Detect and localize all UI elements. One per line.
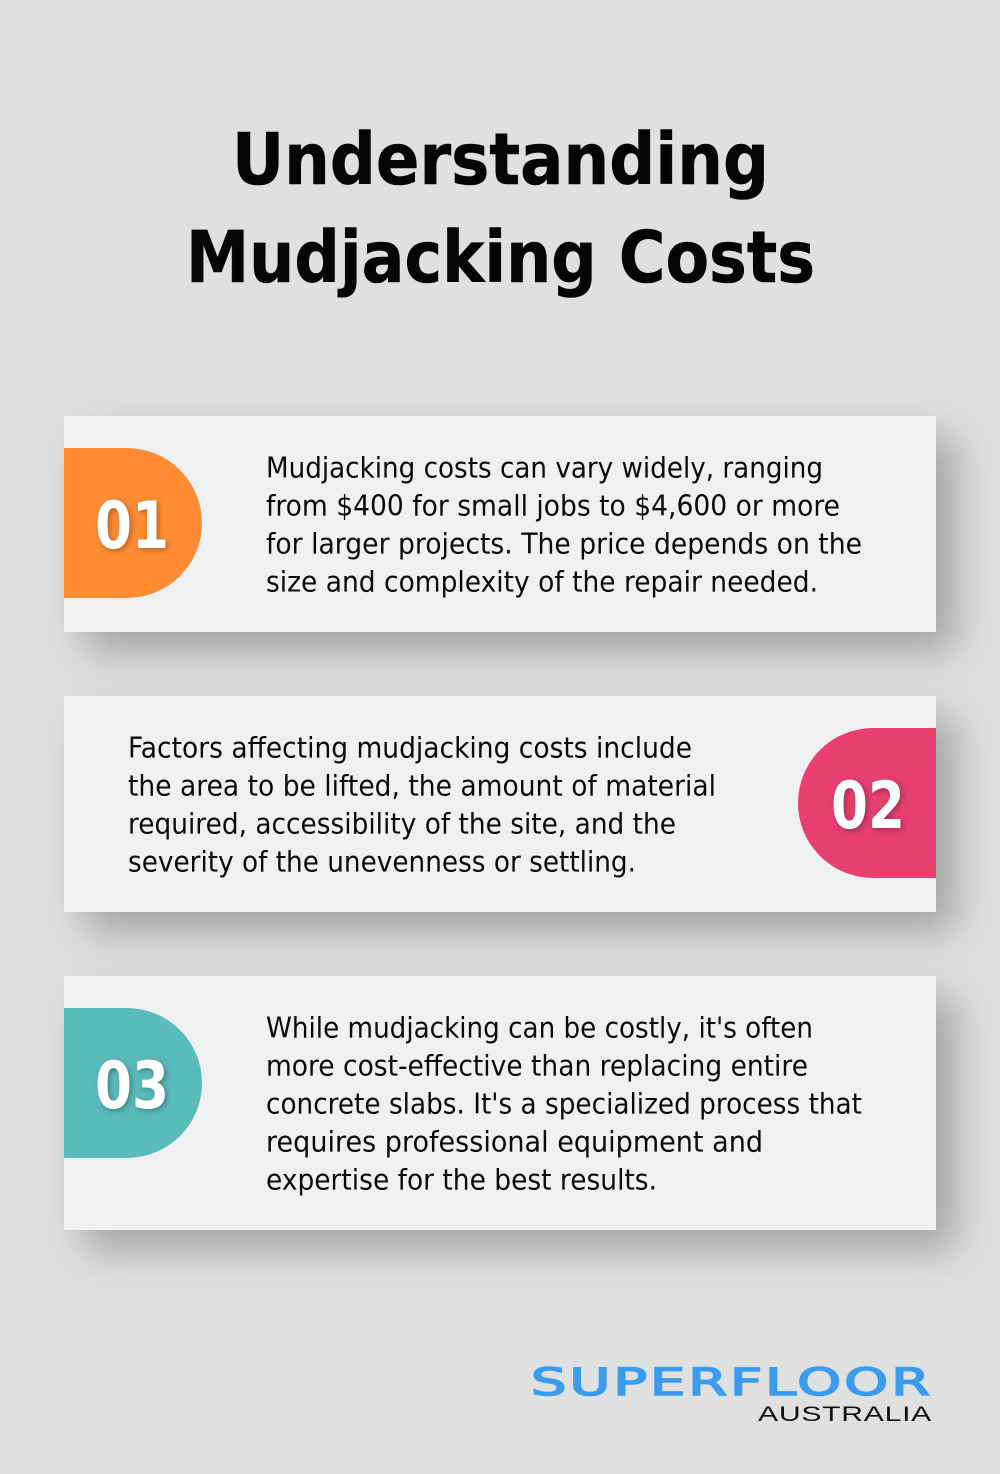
title: Understanding	[232, 118, 769, 201]
text block: card 3	[266, 1012, 862, 1196]
panel: card 3	[64, 976, 936, 1230]
badge: 02: 02	[831, 769, 905, 844]
badge: 02	[798, 728, 936, 878]
text block: card 1: Mudjacking costs can vary widely, ranging	[266, 452, 823, 484]
text block: card 1: size and complexity of the repair needed.	[266, 566, 818, 598]
panel: card 1	[64, 416, 936, 632]
text block: card 2: the area to be lifted, the amount of material	[128, 770, 716, 802]
text block: card 3: requires professional equipment and	[266, 1126, 763, 1158]
badge: 01	[64, 448, 202, 598]
badge: 01: 01	[95, 489, 169, 564]
text block: card 1: from $400 for small jobs to $4,600 or more	[266, 490, 840, 522]
badge: 03	[64, 1008, 202, 1158]
title	[186, 118, 815, 299]
text block: card 1	[266, 452, 862, 598]
text block: card 1: for larger projects. The price depends on the	[266, 528, 862, 560]
text block: card 2: Factors affecting mudjacking costs include	[128, 732, 692, 764]
logo: Superfloor Australia: AUSTRALIA	[758, 1403, 932, 1426]
text block: card 3: concrete slabs. It's a specialized process that	[266, 1088, 862, 1120]
text block: card 3: more cost-effective than replacing entire	[266, 1050, 808, 1082]
text block: card 2: required, accessibility of the site, and the	[128, 808, 676, 840]
title: Mudjacking Costs	[186, 216, 815, 299]
text block: card 2	[128, 732, 716, 878]
badge: 03: 03	[95, 1049, 169, 1124]
logo: Superfloor Australia	[531, 1361, 933, 1426]
text block: card 3: expertise for the best results.	[266, 1164, 657, 1196]
text block: card 2: severity of the unevenness or settling.	[128, 846, 636, 878]
panel: card 2	[64, 696, 936, 912]
text block: card 3: While mudjacking can be costly, it's often	[266, 1012, 813, 1044]
logo: Superfloor Australia: SUPERFLOOR	[531, 1361, 933, 1404]
